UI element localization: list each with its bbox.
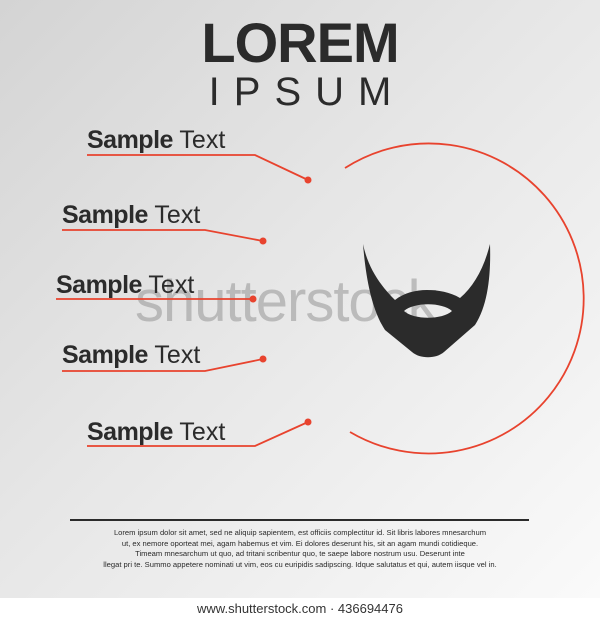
body text: llegat pri te. Summo appetere nominati ut vim, eos cu euripidis sadipscing. Idque salutatus et qui, autem iisque vel in.: [103, 560, 497, 568]
title: IPSUM: [209, 70, 405, 114]
body text: [103, 528, 497, 568]
body text: ut, ex nemore oporteat mei, agam habemus et vim. Ei dolores deserunt his, sit an agam mundi cotidieque.: [122, 538, 478, 548]
icon: beard: [363, 244, 490, 357]
text: sample 3: Sample Text: [56, 271, 194, 299]
text: sample 5: Sample Text: [87, 418, 225, 446]
footer url: www.shutterstock.com · 436694476: [197, 601, 403, 616]
divider: [70, 519, 529, 521]
watermark: shutterstock: [135, 269, 436, 334]
text: sample 1: Sample Text: [87, 126, 225, 154]
text: sample 2: Sample Text: [62, 201, 200, 229]
body text: Lorem ipsum dolor sit amet, sed ne aliquip sapientem, est officiis complectitur id. Sit libris labores mnesarchum: [114, 528, 486, 537]
text: sample 4: Sample Text: [62, 341, 200, 369]
title: [201, 11, 405, 114]
body text: Timeam mnesarchum ut quo, ad tritani scribentur quo, te saepe labore nostrum usu. Deserunt inte: [135, 549, 465, 558]
title: LOREM: [201, 11, 399, 74]
